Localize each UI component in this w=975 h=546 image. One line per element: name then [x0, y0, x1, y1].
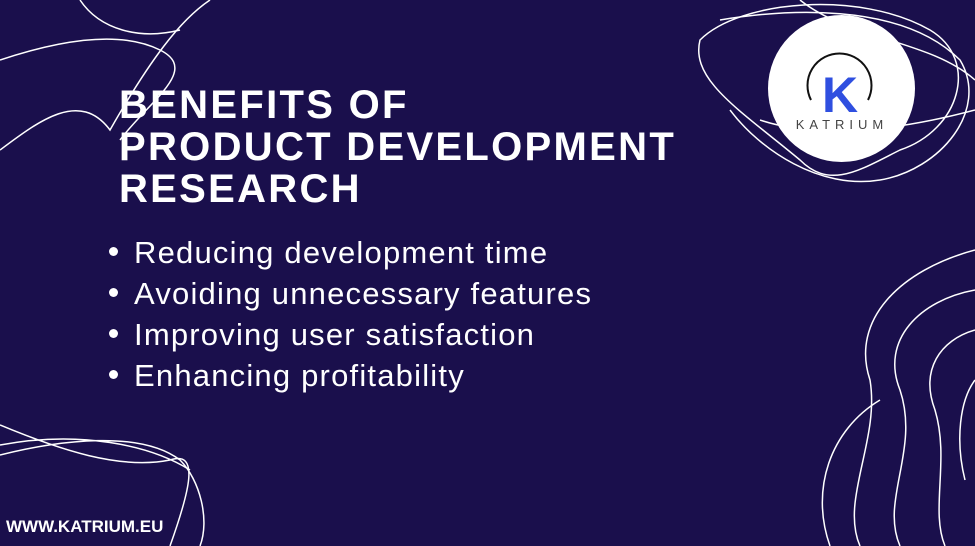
title: BENEFITS OF: [119, 83, 409, 127]
bullet list: Improving user satisfaction: [134, 317, 535, 352]
logo: katrium: KATRIUM: [796, 117, 888, 132]
title: RESEARCH: [119, 167, 362, 211]
bullet list: Reducing development time: [134, 235, 548, 270]
website url: WWW.KATRIUM.EU: [6, 517, 163, 536]
logo: katrium: [768, 15, 915, 162]
title: PRODUCT DEVELOPMENT: [119, 125, 676, 169]
bullet list: Avoiding unnecessary features: [134, 276, 592, 311]
logo: katrium: K: [822, 67, 858, 123]
bullet list: Enhancing profitability: [134, 358, 465, 393]
bullet list: [109, 235, 592, 393]
title: [119, 83, 676, 211]
